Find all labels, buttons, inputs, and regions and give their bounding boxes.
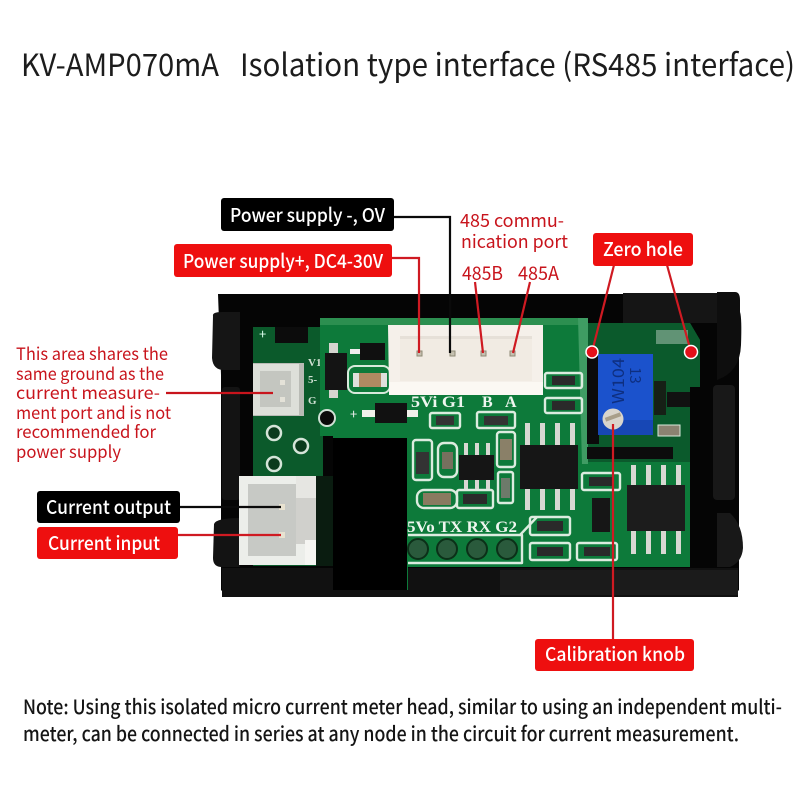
main green circuit board bbox=[320, 318, 713, 590]
blue trimmer potentiometer: W104 bbox=[605, 358, 629, 404]
shared ground warning: power supply bbox=[16, 438, 121, 463]
silkscreen outlined SMD parts bbox=[408, 373, 620, 563]
top-left SMD parts bbox=[325, 343, 418, 423]
485 port note: nication port bbox=[461, 228, 568, 254]
shared ground warning: This area shares the bbox=[16, 340, 168, 365]
black meter housing bbox=[212, 292, 743, 597]
label: power supply positive: Power supply+, DC4-30V bbox=[183, 247, 384, 274]
silkscreen pin labels: A bbox=[505, 394, 517, 411]
SOIC chip 2 bbox=[627, 465, 685, 554]
shared ground warning: ment port and is not bbox=[16, 399, 172, 424]
485B label: 485B bbox=[462, 259, 503, 286]
connector leader lines bbox=[166, 217, 691, 640]
silkscreen pin labels: B bbox=[482, 394, 493, 411]
485A label: 485A bbox=[518, 259, 559, 286]
footer note bbox=[23, 691, 782, 747]
black display ribbon block bbox=[333, 438, 407, 590]
white five-pin 485 connector bbox=[388, 325, 543, 395]
left daughter board area: + bbox=[259, 324, 266, 343]
top-left SMD parts: + bbox=[350, 404, 357, 423]
through holes bbox=[267, 426, 308, 471]
shared ground warning: same ground as the bbox=[16, 360, 164, 385]
label: power supply negative: Power supply -, OV bbox=[230, 201, 386, 228]
left daughter board area: 5- bbox=[308, 374, 318, 386]
shared ground warning bbox=[16, 340, 172, 463]
large two-pin current connector bbox=[239, 476, 316, 565]
shared ground warning: current measure- bbox=[16, 379, 160, 404]
header pads bbox=[408, 539, 517, 559]
small chip bbox=[459, 443, 494, 489]
SMD bodies bbox=[416, 330, 688, 556]
label: zero hole bbox=[593, 233, 693, 266]
silkscreen pin labels: 5Vo TX RX G2 bbox=[407, 519, 517, 536]
485 port note bbox=[460, 207, 568, 254]
meter module photo bbox=[212, 292, 743, 597]
blue trimmer potentiometer: 13 bbox=[625, 367, 646, 384]
blue trimmer potentiometer bbox=[587, 352, 653, 444]
left daughter board area: V1 bbox=[308, 357, 321, 369]
silkscreen pin labels: 5Vi G1 bbox=[411, 394, 465, 411]
mounting hole bbox=[319, 410, 335, 426]
left daughter board area: G bbox=[308, 395, 317, 407]
zero hole markers bbox=[586, 346, 698, 358]
left daughter board area bbox=[253, 324, 333, 566]
shared ground warning: recommended for bbox=[16, 418, 156, 443]
small two-pin connector bbox=[253, 363, 304, 416]
silkscreen pin labels bbox=[407, 394, 517, 536]
label: zero hole: Zero hole bbox=[603, 235, 683, 262]
label: calibration knob: Calibration knob bbox=[545, 640, 685, 667]
485 port note: 485 commu- bbox=[460, 207, 564, 233]
label: current input: Current input bbox=[48, 529, 160, 556]
SOIC chip 1 bbox=[520, 423, 578, 510]
label: current output: Current output bbox=[46, 493, 171, 520]
title: KV-AMP070mA bbox=[21, 40, 219, 85]
